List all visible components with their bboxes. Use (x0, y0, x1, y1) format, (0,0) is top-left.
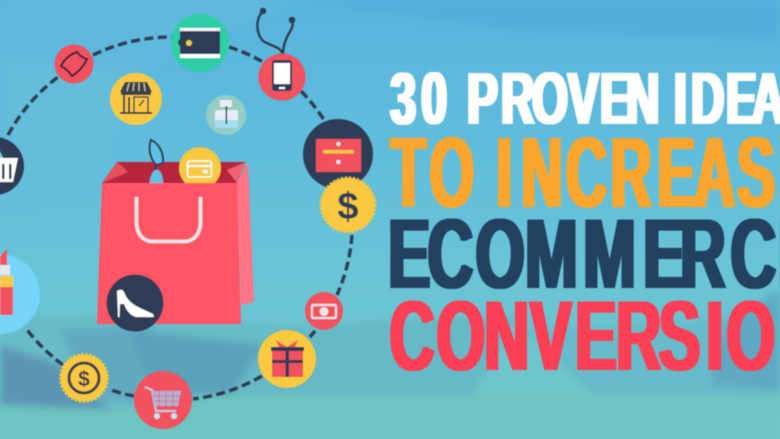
icon: coin badge: $ (78, 368, 90, 391)
title (388, 58, 780, 392)
icon: drawer (303, 119, 373, 189)
icon: dollar badge: $ (337, 186, 359, 228)
icon: perfume (206, 95, 246, 135)
icon: wallet (171, 14, 229, 72)
icon: ticket (54, 44, 94, 84)
icon: cart (134, 371, 192, 429)
icon: gift (258, 330, 316, 388)
shopping bag (97, 140, 254, 324)
bag handle (136, 197, 200, 242)
icon: lipstick (0, 249, 40, 334)
icon: credit card (179, 147, 221, 189)
icon: shop (110, 73, 162, 125)
dashed ring (8, 37, 352, 399)
icon: coin badge (60, 354, 108, 402)
icon: banknote (305, 292, 343, 330)
icon: high heel shoe (106, 274, 164, 332)
icon: dollar badge (321, 178, 375, 232)
icon: hanging phone (257, 8, 306, 100)
icon: glasses (149, 140, 163, 190)
icon: basket (0, 137, 24, 195)
